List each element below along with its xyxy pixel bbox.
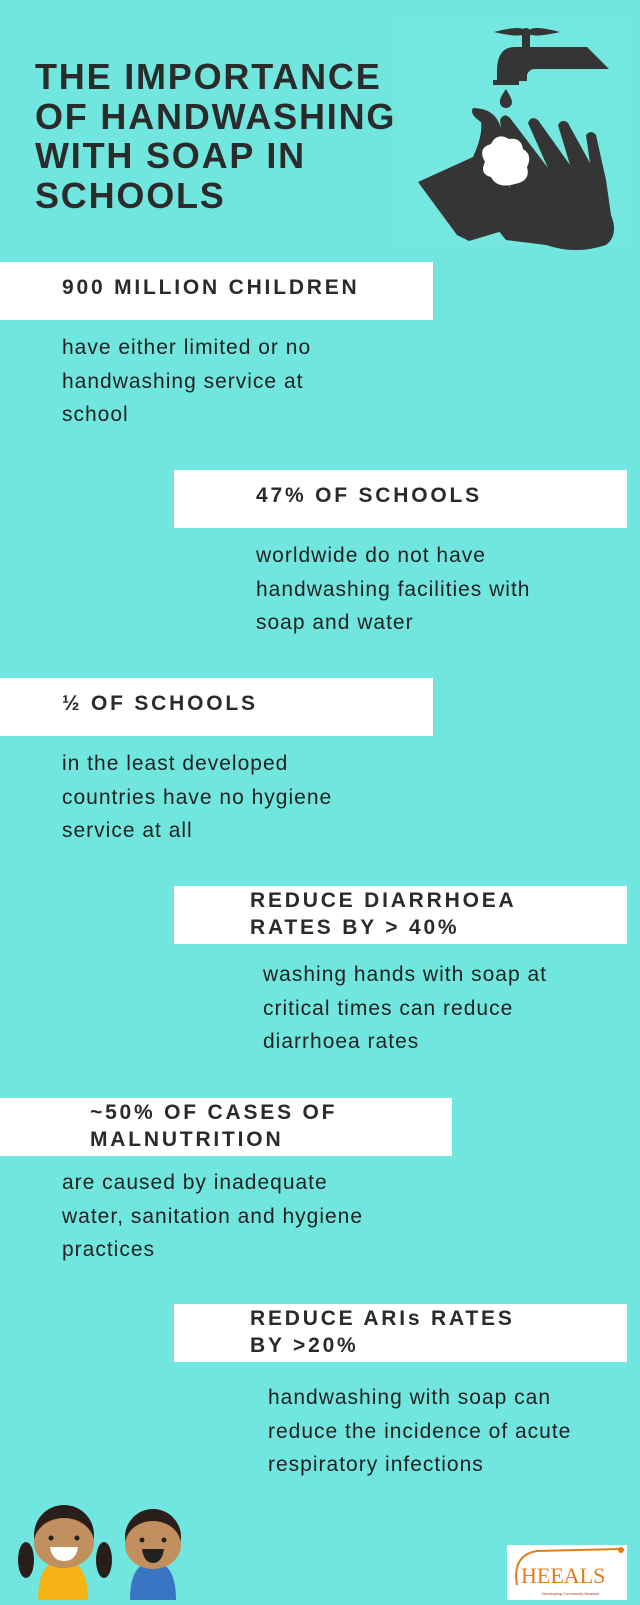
text: 900 million [62,336,311,426]
text: diarrhoea: diarrhoea rates [263,1030,419,1053]
panel: half [0,678,433,736]
text: 47%: worldwide do not have [256,544,486,567]
panel: 47% [174,470,627,528]
title: OF HANDWASHING [35,96,396,136]
text: 900 million: school [62,403,129,426]
panel: 900 million [0,262,433,320]
heading: malnutrition: ~50% OF CASES OF [90,1101,337,1124]
heading: ARIs: BY >20% [250,1334,359,1357]
text: 47%: soap and water [256,611,414,634]
icon: handwashing [418,28,614,250]
text: half: countries have no hygiene [62,786,332,808]
text: malnutrition: water, sanitation and hygiene [62,1204,363,1228]
heading: diarrhoea [250,889,516,939]
text: half: service at all [62,819,193,842]
text: half: in the least developed [62,752,288,775]
text: ARIs: respiratory infections [268,1453,484,1476]
text: half [62,752,332,842]
text: diarrhoea [263,963,547,1053]
text: malnutrition: practices [62,1238,155,1261]
heading: ARIs: REDUCE ARIs RATES [250,1307,515,1330]
text: ARIs [268,1386,571,1476]
title: WITH SOAP IN [35,135,306,176]
heading: ARIs [250,1307,515,1357]
panel: diarrhoea [174,886,627,944]
text: 47% [256,544,530,634]
text: malnutrition: are caused by inadequate [62,1171,328,1194]
logo: HEEALS: HEEALS [521,1563,605,1588]
panel: ARIs [174,1304,627,1362]
heading: 47%: 47% OF SCHOOLS [256,484,482,507]
logo: HEEALS: Developing Community Network [542,1591,599,1596]
text: diarrhoea: critical times can reduce [263,996,513,1020]
title: SCHOOLS [35,174,226,216]
heading: diarrhoea: RATES BY > 40% [250,916,459,939]
text: ARIs: handwashing with soap can [268,1386,551,1409]
heading: malnutrition: MALNUTRITION [90,1128,283,1151]
panel: malnutrition [0,1098,452,1156]
text: diarrhoea: washing hands with soap at [263,963,547,986]
logo: HEEALS [507,1545,627,1600]
text: malnutrition [62,1171,363,1261]
heading: malnutrition [90,1101,337,1151]
text: 900 million: have either limited or no [62,336,311,359]
heading: diarrhoea: REDUCE DIARRHOEA [250,889,516,912]
heading: half: ½ OF SCHOOLS [62,692,258,715]
title: THE IMPORTANCE [35,56,382,97]
text: ARIs: reduce the incidence of acute [268,1420,571,1442]
title [35,56,396,216]
icon: children [18,1505,181,1600]
heading: 900 million: 900 MILLION CHILDREN [62,276,360,299]
text: 47%: handwashing facilities with [256,578,530,600]
text: 900 million: handwashing service at [62,370,303,392]
